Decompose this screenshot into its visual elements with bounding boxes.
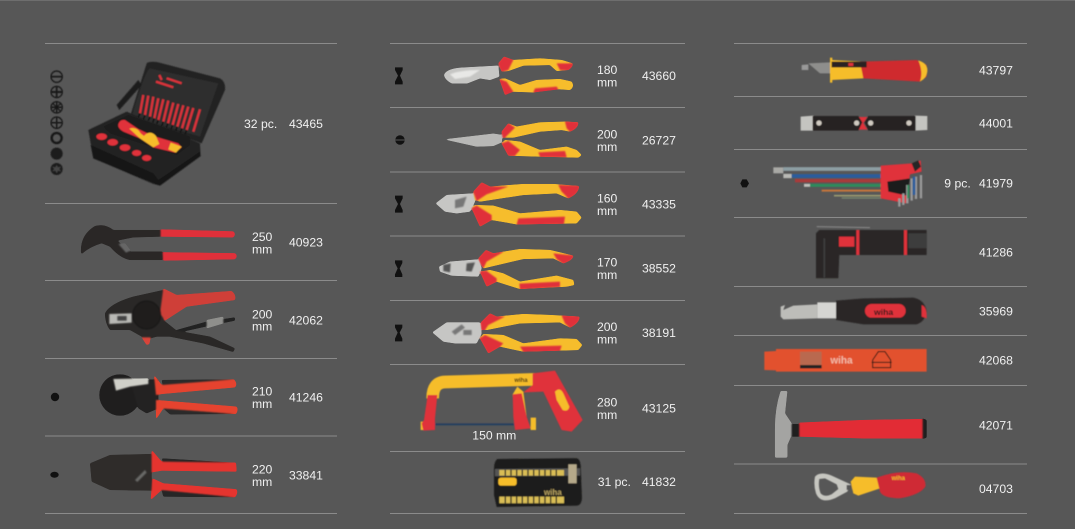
label: length: mm xyxy=(597,140,617,154)
panel: left column xyxy=(50,62,323,500)
icon: screw tip profiles xyxy=(51,71,63,175)
row: cutters 38552 xyxy=(395,249,676,289)
picture: hammer xyxy=(775,391,927,458)
icon: cut profile xyxy=(395,67,403,84)
icon: hexagon profile xyxy=(740,179,749,187)
icon: cut profile xyxy=(395,260,402,277)
picture: tool bag xyxy=(88,62,225,186)
row: cutters 38191 xyxy=(395,313,676,353)
picture: angled tool xyxy=(816,227,927,278)
icon: round profile xyxy=(51,393,59,401)
label: article number: 04703 xyxy=(979,482,1013,496)
label: pieces: 32 pc. xyxy=(244,117,277,131)
label: length: mm xyxy=(252,242,272,256)
label: length: 200 xyxy=(597,127,617,141)
label: length: mm xyxy=(597,408,617,422)
row: crimping pliers 41246 xyxy=(51,374,323,419)
picture: ratchet crimping pliers xyxy=(90,450,237,500)
label: article number: 41286 xyxy=(979,245,1013,259)
label: article number: 43660 xyxy=(642,69,676,83)
icon: cut profile xyxy=(395,196,403,213)
row: hacksaw 43125 xyxy=(421,371,676,443)
panel: middle column xyxy=(395,57,676,507)
label: length: 180 xyxy=(597,63,617,77)
picture: bottle opener xyxy=(814,472,925,500)
picture: cutters xyxy=(432,313,582,353)
label: pieces: 9 pc. xyxy=(944,177,971,191)
label: article number: 33841 xyxy=(289,468,323,482)
label: length: mm xyxy=(597,268,617,282)
label: article number: 41246 xyxy=(289,391,323,405)
label: article number: 41979 xyxy=(979,177,1013,191)
label: pieces: 31 pc. xyxy=(598,475,631,489)
row: cutters 43335 xyxy=(395,182,676,227)
picture: cutters xyxy=(436,182,582,227)
row: bottle opener 04703 xyxy=(814,472,1013,500)
picture: cutters xyxy=(439,249,574,289)
label: article number: 38191 xyxy=(642,326,676,340)
label: article number: 42062 xyxy=(289,313,323,327)
picture: double bit holder xyxy=(801,116,927,131)
row: crimping pliers 33841 xyxy=(50,450,323,500)
row: double bit holder 44001 xyxy=(801,116,1013,131)
label: length: 250 xyxy=(252,230,272,244)
picture: cable knife: wiha xyxy=(873,307,893,317)
picture: bottle opener: wiha xyxy=(891,476,906,482)
row: needle nose pliers 26727 xyxy=(395,122,676,158)
label: article number: 44001 xyxy=(979,116,1013,130)
icon: cut profile xyxy=(395,325,402,341)
label: article number: 41832 xyxy=(642,475,676,489)
label: length: 210 xyxy=(252,384,272,398)
label: blade length: 150 mm xyxy=(472,429,516,443)
picture: needle nose pliers xyxy=(444,122,582,158)
picture: hacksaw: wiha xyxy=(513,378,528,384)
row: cutters 43660 xyxy=(395,57,676,95)
label: length: mm xyxy=(252,320,272,334)
picture: stripping pliers xyxy=(105,288,235,352)
label: length: mm xyxy=(252,475,272,489)
label: article number: 40923 xyxy=(289,236,323,250)
picture: plier wrench xyxy=(81,225,237,261)
icon: slot profile xyxy=(395,135,405,145)
row: cable knife 35969 xyxy=(781,298,1013,324)
row: hammer 42071 xyxy=(775,391,1013,458)
row: plier wrench 40923 xyxy=(81,225,323,261)
picture: bit box: wiha xyxy=(543,488,562,497)
row: stripping pliers 42062 xyxy=(105,288,323,352)
picture: bit box xyxy=(494,458,582,507)
label: length: mm xyxy=(597,204,617,218)
row: hex key set 41979 xyxy=(740,160,1013,207)
row: voltage tester 43797 xyxy=(802,58,1013,83)
row: folding ruler 42068 xyxy=(764,349,1013,372)
label: article number: 43465 xyxy=(289,117,323,131)
label: article number: 42071 xyxy=(979,418,1013,432)
label: length: 280 xyxy=(597,395,617,409)
label: length: 200 xyxy=(597,320,617,334)
panel: right column xyxy=(740,58,1013,500)
icon: oval profile xyxy=(50,472,59,478)
label: article number: 42068 xyxy=(979,354,1013,368)
picture: cable knife xyxy=(781,298,927,324)
picture: crimping pliers xyxy=(99,374,238,419)
label: article number: 43797 xyxy=(979,63,1013,77)
label: length: 160 xyxy=(597,192,617,206)
label: article number: 26727 xyxy=(642,133,676,147)
picture: folding ruler: wiha xyxy=(829,356,853,367)
picture: hacksaw xyxy=(421,371,583,432)
label: article number: 43335 xyxy=(642,198,676,212)
label: length: mm xyxy=(597,332,617,346)
label: article number: 35969 xyxy=(979,304,1013,318)
label: length: 200 xyxy=(252,307,272,321)
label: length: mm xyxy=(597,76,617,90)
row: screwdriver bag 43465 xyxy=(51,62,323,186)
label: length: 220 xyxy=(252,462,272,476)
label: article number: 43125 xyxy=(642,402,676,416)
label: length: mm xyxy=(252,397,272,411)
picture: cutters xyxy=(444,57,573,95)
label: length: 170 xyxy=(597,255,617,269)
row: bit box 41832 xyxy=(494,458,676,507)
picture: hex key set xyxy=(773,160,922,207)
label: article number: 38552 xyxy=(642,262,676,276)
picture: voltage tester xyxy=(802,58,927,83)
picture: folding ruler xyxy=(764,349,927,372)
row: angled tool 41286 xyxy=(816,227,1013,278)
